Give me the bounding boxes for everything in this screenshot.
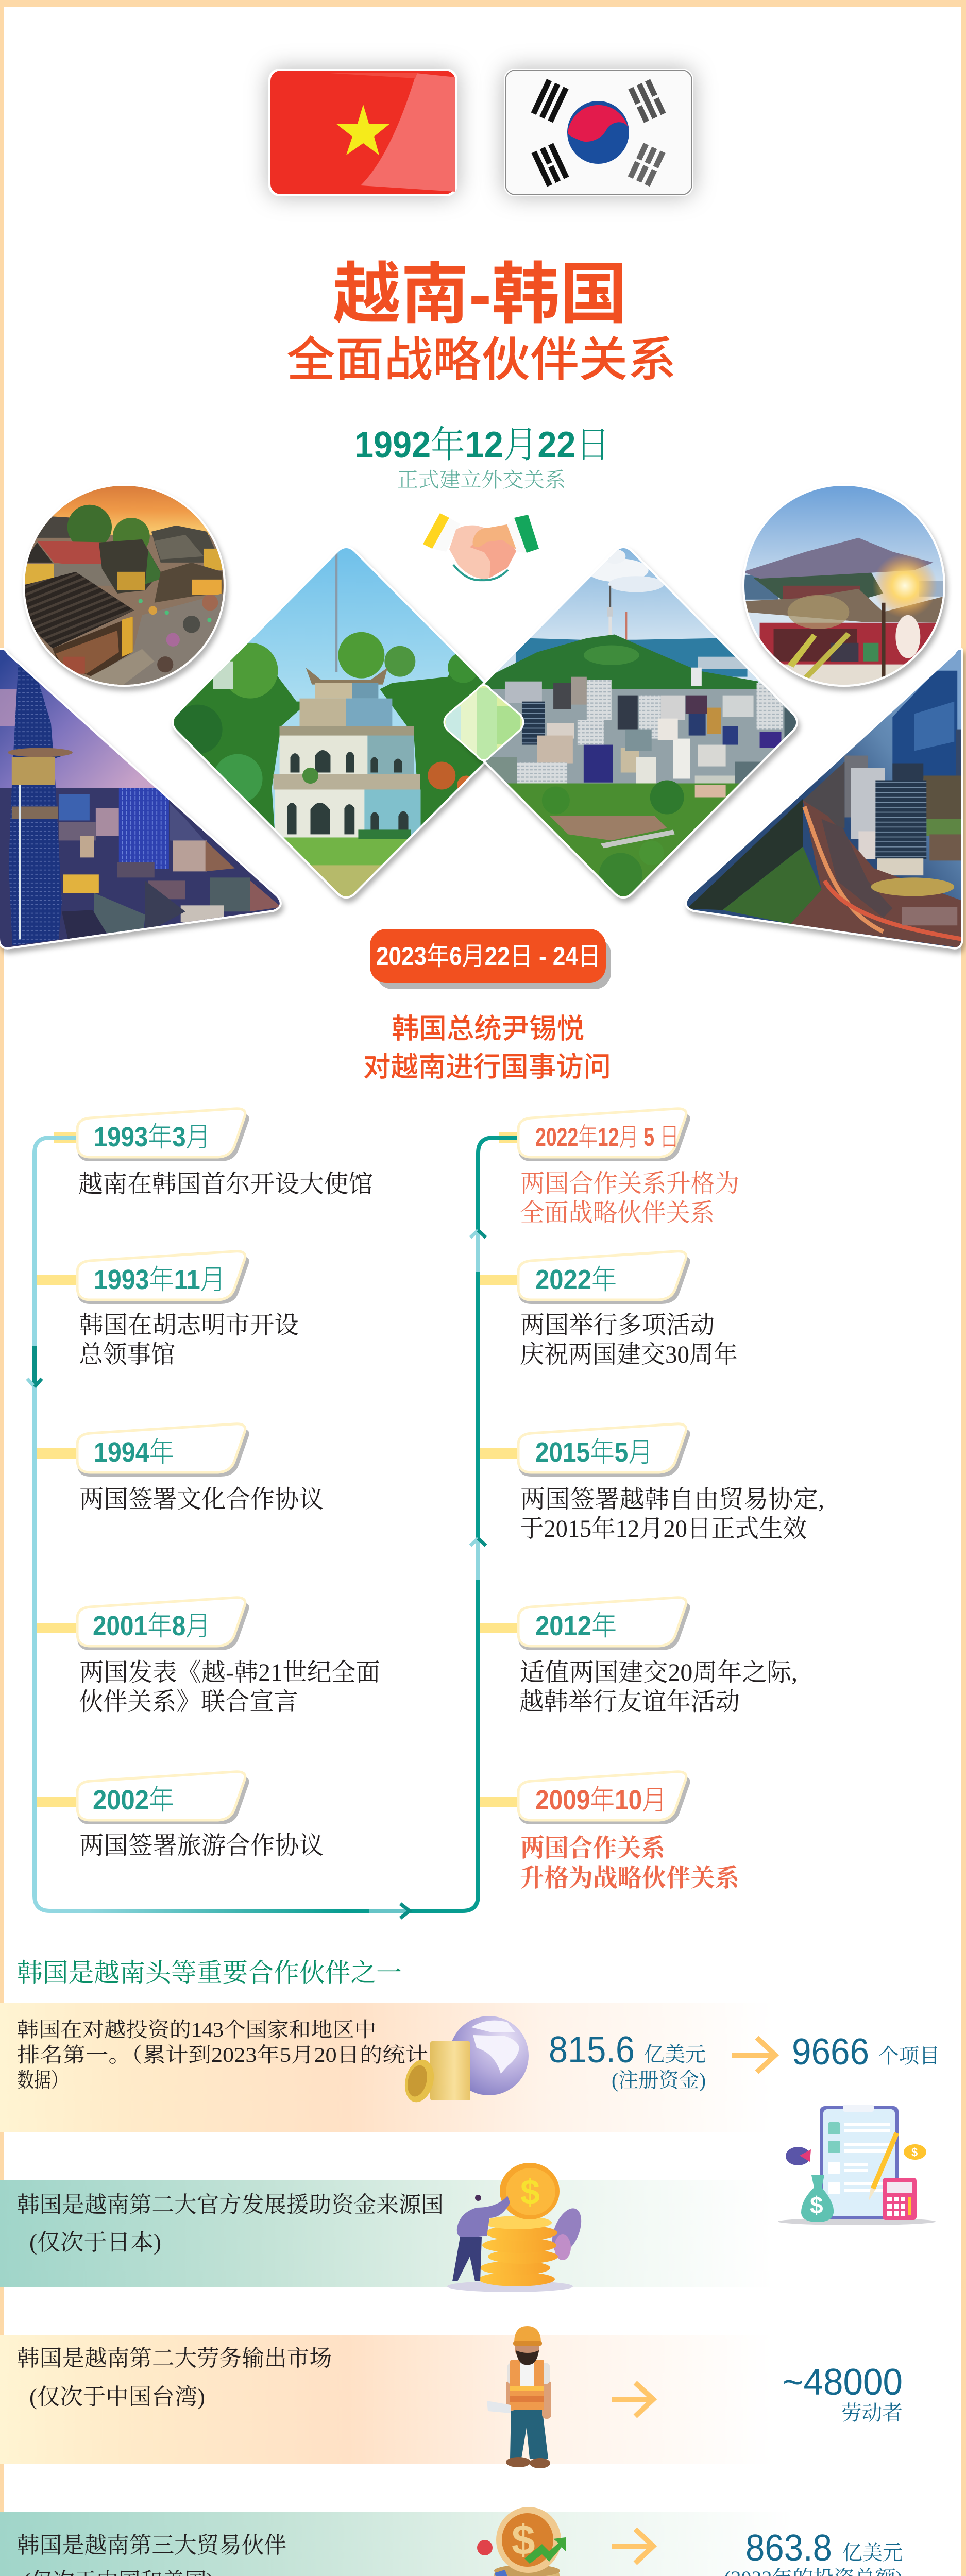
trade description	[17, 2533, 286, 2576]
icon: phone with calculator and money bag: $	[810, 2192, 823, 2218]
timeline item: 2015-05	[518, 1424, 824, 1543]
timeline item: 2012: 2012年	[535, 1611, 617, 1641]
date of diplomatic relations: 1992年12月22日	[354, 425, 610, 466]
timeline item: 1993-03: 1993年3月	[94, 1122, 210, 1153]
panel: labor export	[0, 2326, 903, 2468]
timeline item: 2012	[518, 1598, 798, 1716]
timeline path	[35, 1138, 518, 1911]
timeline connectors	[36, 1132, 518, 1807]
date pill: state visit dates	[370, 929, 611, 989]
timeline item: 2015-05: 2015年5月	[535, 1437, 653, 1468]
timeline item: 2015-05: 于2015年12月20日正式生效	[520, 1515, 807, 1543]
stat: projects: 个项目	[878, 2044, 940, 2067]
timeline item: 2002: 2002年	[93, 1785, 174, 1816]
arrow: timeline down	[27, 1346, 42, 1387]
date of diplomatic relations: 正式建立外交关系	[397, 468, 566, 492]
timeline item: 2022: 2022年	[535, 1264, 617, 1295]
stat: trade value	[724, 2528, 903, 2576]
photo: Seoul skyline diamond	[445, 544, 806, 905]
timeline item: 2022: 庆祝两国建交30周年	[520, 1341, 738, 1368]
investment description: 排名第一。（累计到2023年5月20日的统计	[17, 2043, 428, 2066]
photo: Gyeongbokgung palace circle	[741, 482, 948, 689]
trigrams	[531, 79, 666, 187]
date pill: state visit dates: 2023年6月22日 - 24日	[376, 942, 601, 971]
timeline item: 2009-10: 两国合作关系	[520, 1835, 666, 1862]
labor description: 韩国是越南第二大劳务输出市场	[17, 2346, 332, 2371]
timeline item: 2022-12-05: 2022年12月 5 日	[535, 1123, 679, 1151]
timeline item: 2022	[518, 1251, 738, 1368]
timeline item: 1994: 1994年	[94, 1437, 174, 1468]
photo: Turtle Tower Hanoi diamond	[171, 548, 490, 906]
timeline item: 2022-12-05	[518, 1109, 739, 1227]
arrow: timeline up upper	[470, 1230, 486, 1272]
investment description: 韩国在对越投资的143个国家和地区中	[17, 2018, 376, 2041]
investment description: 数据）	[17, 2069, 68, 2092]
timeline item: 2001-08	[77, 1598, 380, 1716]
timeline item: 1993-11	[77, 1251, 299, 1368]
section heading: 韩国是越南头等重要合作伙伴之一	[17, 1958, 402, 1987]
investment description	[17, 2018, 428, 2092]
timeline item: 1994	[77, 1424, 324, 1513]
arrow	[732, 2038, 775, 2072]
panel: ODA	[0, 2163, 773, 2292]
timeline item: 1994: 两国签署文化合作协议	[79, 1486, 324, 1513]
stat: projects: 9666	[792, 2031, 869, 2073]
stat: workers: 劳动者	[841, 2401, 903, 2425]
subheading: state visit	[363, 1013, 611, 1082]
ODA description: (仅次于日本)	[29, 2230, 161, 2255]
timeline item: 2022: 两国举行多项活动	[520, 1312, 715, 1339]
timeline item: 2012: 适值两国建交20周年之际,	[520, 1659, 798, 1686]
icon: construction worker	[487, 2326, 551, 2468]
timeline item: 2022-12-05: 全面战略伙伴关系	[520, 1199, 715, 1227]
timeline item: 2012: 越韩举行友谊年活动	[519, 1688, 740, 1716]
stat: trade value: 863.8	[745, 2528, 832, 2569]
timeline item: 2002: 两国签署旅游合作协议	[79, 1832, 324, 1859]
icon: coin with rising arrow: $	[512, 2517, 535, 2564]
date of diplomatic relations	[354, 425, 610, 492]
stat: projects	[792, 2031, 940, 2073]
icon: globe and coins	[401, 2016, 529, 2105]
arrow: timeline up lower	[470, 1538, 486, 1580]
subheading: state visit: 韩国总统尹锡悦	[392, 1013, 584, 1044]
panel: investment	[0, 2003, 940, 2132]
stat: registered capital: 815.6	[549, 2029, 635, 2071]
timeline item: 2002	[77, 1772, 324, 1859]
panel: trade	[0, 2507, 903, 2576]
icon: handshake	[423, 513, 539, 580]
arrow: timeline right	[369, 1904, 410, 1918]
timeline item: 1993-03: 越南在韩国首尔开设大使馆	[78, 1171, 373, 1198]
trade description: 韩国是越南第三大贸易伙伴	[17, 2533, 286, 2558]
photo: Hoi An ancient town circle	[22, 482, 229, 689]
stat: registered capital: 亿美元	[644, 2043, 706, 2066]
ODA description	[17, 2192, 444, 2255]
labor description	[17, 2346, 332, 2410]
icon: phone with calculator and money bag: $	[911, 2146, 918, 2159]
subheading: state visit: 对越南进行国事访问	[363, 1052, 611, 1082]
arrow	[612, 2529, 653, 2563]
icon: man pushing coin stack: $	[520, 2173, 540, 2212]
ODA description: 韩国是越南第二大官方发展援助资金来源国	[17, 2192, 444, 2217]
timeline item: 2009-10	[518, 1772, 740, 1892]
timeline item: 2009-10: 2009年10月	[535, 1785, 667, 1816]
timeline item: 2001-08: 两国发表《越-韩21世纪全面	[79, 1659, 380, 1686]
stat: registered capital	[549, 2029, 706, 2092]
photo overlap: central small diamond	[443, 683, 526, 765]
title: 越南-韩国	[333, 257, 628, 332]
timeline item: 2009-10: 升格为战略伙伴关系	[520, 1865, 740, 1892]
photo: Ho Chi Minh City triangle	[0, 643, 287, 952]
stat: trade value: 亿美元	[842, 2541, 903, 2564]
icon: man pushing coin stack	[447, 2163, 587, 2292]
taegeuk circle	[567, 101, 629, 164]
title	[286, 257, 676, 386]
stat: workers: ~48000	[783, 2362, 903, 2403]
icon: phone with calculator and money bag	[778, 2105, 936, 2225]
timeline item: 1993-11: 韩国在胡志明市开设	[79, 1312, 299, 1339]
timeline item: 2015-05: 两国签署越韩自由贸易协定,	[520, 1486, 824, 1513]
timeline item: 1993-03	[77, 1109, 373, 1198]
timeline item: 1993-11: 总领事馆	[79, 1341, 175, 1368]
arrow	[612, 2383, 653, 2416]
labor description: (仅次于中国台湾)	[29, 2384, 205, 2410]
timeline item: 1993-11: 1993年11月	[94, 1264, 225, 1295]
flag: Vietnam	[268, 69, 457, 196]
icon: coin with rising arrow	[477, 2507, 572, 2576]
Turtle Tower	[274, 668, 421, 839]
flag: South Korea	[504, 69, 693, 196]
photo: Seoul night city triangle	[680, 643, 966, 952]
title: 全面战略伙伴关系	[286, 334, 676, 386]
timeline item: 2022-12-05: 两国合作关系升格为	[520, 1170, 739, 1197]
stat: registered capital: (注册资金)	[612, 2069, 706, 2092]
timeline item: 2001-08: 2001年8月	[93, 1611, 210, 1641]
stat: workers	[783, 2362, 903, 2425]
timeline item: 2001-08: 伙伴关系》联合宣言	[79, 1688, 298, 1716]
